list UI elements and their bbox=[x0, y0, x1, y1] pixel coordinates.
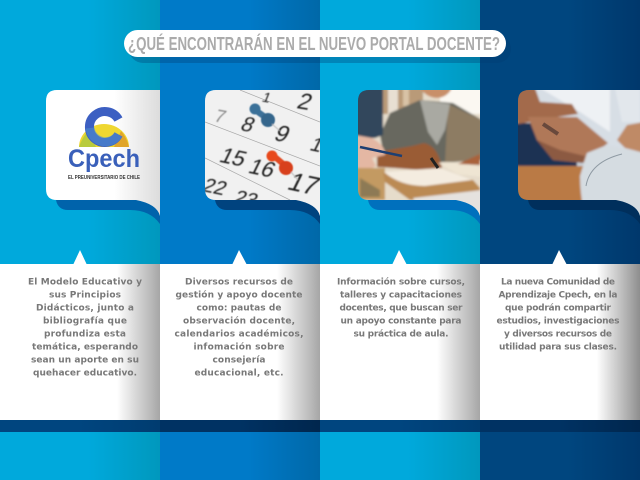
panel: card 2 calendar photo: 7 bbox=[212, 106, 229, 127]
panel: card 2 calendar photo: 15 bbox=[216, 143, 251, 171]
text: description 3: talleres y capacitaciones bbox=[340, 290, 462, 300]
text: description 1: sus Principios bbox=[49, 290, 121, 300]
icon: blue pin bbox=[250, 104, 280, 131]
text: description 2: como: pautas de bbox=[196, 304, 282, 314]
panel: card 2 calendar photo: 9 bbox=[271, 121, 295, 147]
text: description 3: docentes, que buscan ser bbox=[340, 304, 463, 314]
text: description 1: temática, esperando bbox=[32, 342, 138, 352]
text: description 1: bibliografía que bbox=[43, 316, 127, 326]
text: description 1 bbox=[28, 278, 142, 378]
panel: card 1 logo bbox=[46, 90, 160, 224]
text: description 2: calendarios académicos, bbox=[174, 328, 304, 340]
icon: Cpech logo: Cpech bbox=[68, 145, 140, 173]
panel: card 2 calendar photo: 17 bbox=[283, 167, 325, 200]
panel: text block 3 bbox=[320, 250, 480, 432]
icon: Cpech logo bbox=[68, 112, 141, 181]
panel: card 2 calendar photo: 1 bbox=[306, 134, 327, 157]
panel: card 2 calendar photo: 22 bbox=[199, 175, 230, 200]
text: description 3: un apoyo constante para bbox=[340, 316, 462, 326]
text: description 2: consejería bbox=[212, 356, 266, 366]
text: description 1: profundiza esta bbox=[44, 330, 126, 340]
icon: Cpech logo: EL PREUNIVERSITARIO DE CHILE bbox=[68, 175, 141, 181]
text: description 2: gestión y apoyo docente bbox=[176, 290, 302, 300]
text: description 3: su práctica de aula. bbox=[354, 330, 448, 340]
text: description 2: observación docente, bbox=[183, 316, 295, 326]
text: description 1: El Modelo Educativo y bbox=[28, 278, 142, 288]
text: description 4: utilidad para sus clases. bbox=[499, 342, 617, 352]
text: description 1: Didácticos, junto a bbox=[36, 304, 134, 314]
text: description 2 bbox=[174, 278, 304, 378]
title banner bbox=[124, 30, 511, 63]
panel: card 2 calendar photo: 8 bbox=[237, 112, 259, 137]
panel: card 4 handshake photo bbox=[515, 86, 640, 224]
panel: card 3 study photo bbox=[355, 86, 484, 224]
text: description 4: estudios, investigaciones bbox=[496, 316, 620, 326]
panel: card 2 calendar photo: 16 bbox=[245, 154, 280, 182]
panel: card 2 calendar photo: 1 bbox=[260, 89, 274, 106]
panel: card 2 calendar photo bbox=[205, 90, 320, 224]
text: description 4: La nueva Comunidad de bbox=[501, 278, 615, 288]
panel: card 2 calendar photo: 23 bbox=[230, 187, 261, 212]
text: description 4: que podrán compartir bbox=[505, 304, 612, 314]
title banner: ¿QUÉ ENCONTRARÁN EN EL NUEVO PORTAL DOCENTE? bbox=[128, 33, 500, 54]
text: description 2: educacional, etc. bbox=[194, 368, 284, 378]
text: description 1: quehacer educativo. bbox=[33, 368, 137, 378]
panel: text block 2 bbox=[160, 250, 320, 432]
text: description 3 bbox=[337, 276, 465, 340]
text: description 4: Aprendizaje Cpech, en la bbox=[498, 290, 618, 300]
text: description 2: infomación sobre bbox=[194, 342, 284, 352]
panel: card 2 calendar photo: 2 bbox=[294, 88, 316, 115]
panel: text block 1 bbox=[0, 250, 160, 432]
text: description 3: Información sobre cursos, bbox=[337, 276, 465, 288]
text: description 1: sean un aporte en su bbox=[31, 356, 139, 366]
text: description 2: Diversos recursos de bbox=[185, 278, 293, 288]
text: description 4 bbox=[496, 278, 620, 352]
text: description 4: y diversos recursos de bbox=[504, 330, 612, 340]
icon: red pin bbox=[266, 150, 298, 180]
panel: text block 4 bbox=[480, 250, 640, 432]
